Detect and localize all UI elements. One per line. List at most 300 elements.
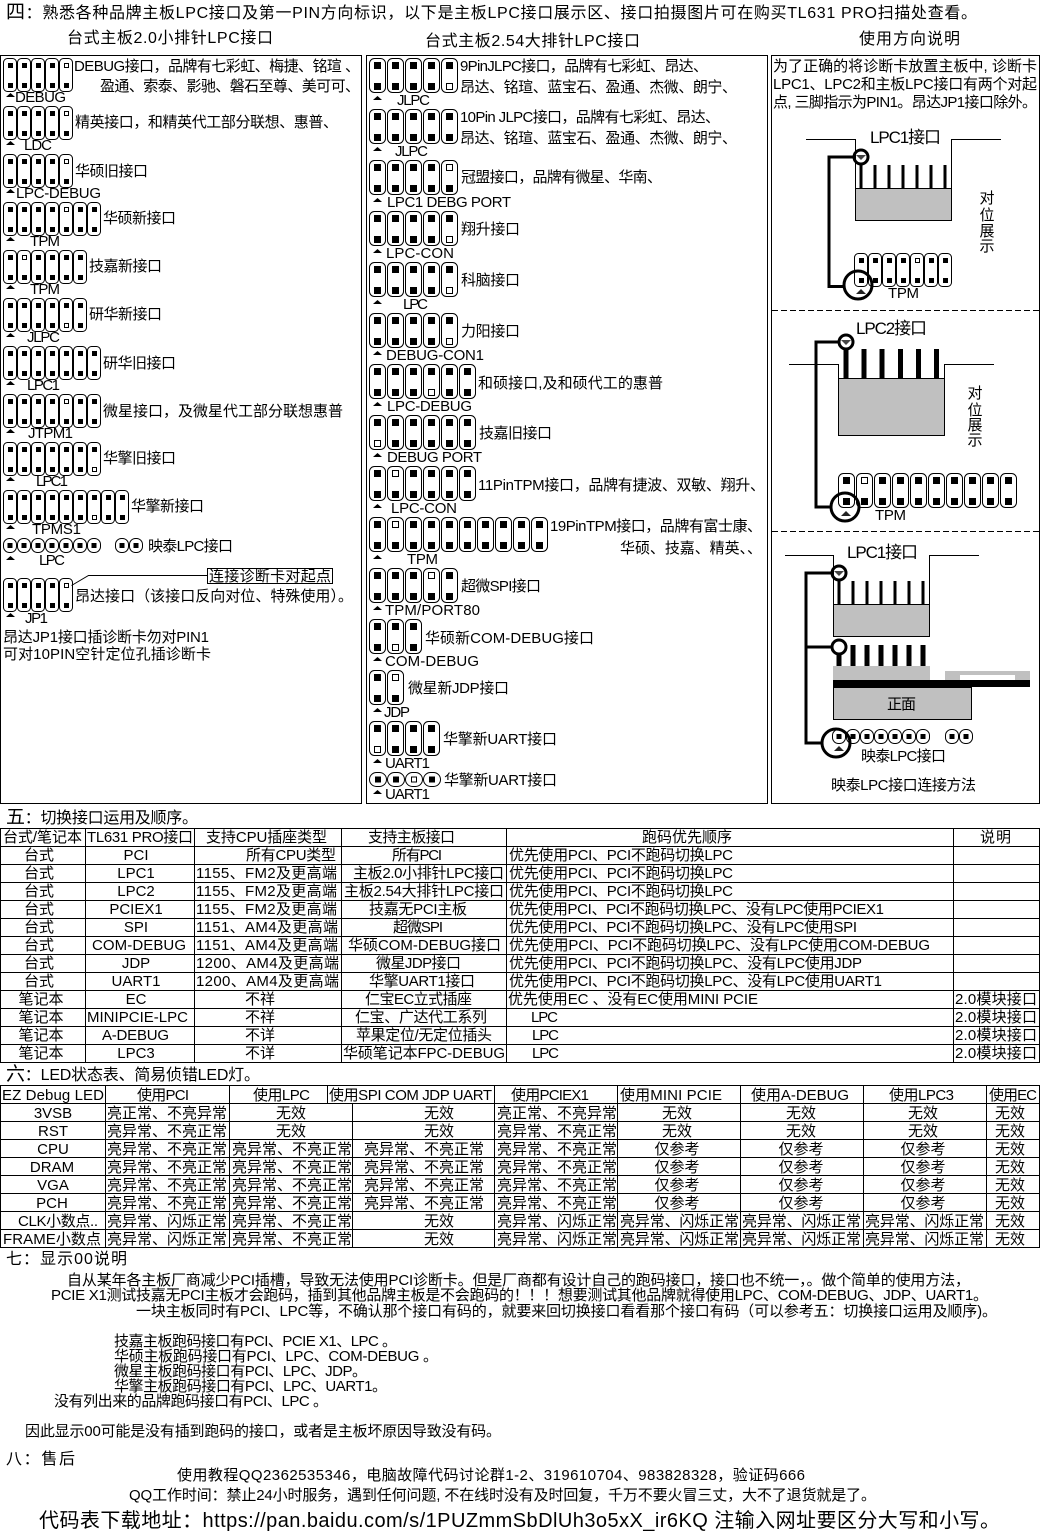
- diagram: LPC2 alignment: TPM: [875, 507, 906, 524]
- table header: 使用EC: [989, 1087, 1037, 1104]
- row: RST: 无效: [995, 1123, 1025, 1140]
- table header: 支持CPU插座类型: [206, 829, 327, 846]
- callout: connect start point: [72, 568, 332, 586]
- row: LPC3: LPC: [532, 1045, 559, 1062]
- row: DRAM: DRAM: [30, 1159, 74, 1176]
- diagram: LPC2 alignment: 对: [967, 385, 983, 402]
- row: LPC2: 台式: [24, 883, 54, 900]
- connector: JDP: JDP: [384, 704, 410, 721]
- connector: 11Pin TPM: 11PinTPM接口，品牌有捷波、双敏、翔升、: [478, 477, 765, 494]
- row: RST: 无效: [424, 1123, 454, 1140]
- row: CLK: 亮异常、闪烁正常: [865, 1213, 984, 1230]
- connector: JP1: JP1: [25, 610, 48, 627]
- row: PCI: 优先使用PCI、PCI不跑码切换LPC: [509, 847, 733, 864]
- row: JDP: 优先使用PCI、PCI不跑码切换LPC、没有LPC使用JDP: [509, 955, 862, 972]
- table header: EZ Debug LED: [2, 1087, 104, 1104]
- row: JDP: 1200、AM4及更高端: [196, 955, 339, 972]
- diagram: LPC1 alignment: 位: [979, 207, 995, 224]
- row: LPC1: 主板2.0小排针LPC接口: [353, 864, 504, 882]
- row: RST: 无效: [786, 1123, 816, 1140]
- connector: 19Pin TPM: TPM: [407, 551, 438, 568]
- connector: DEBUG: DEBUG: [15, 89, 66, 106]
- row: COM-DEBUG: 1151、AM4及更高端: [196, 937, 338, 954]
- connector: TPMS1: 华擎新接口: [131, 498, 204, 515]
- connector: 19Pin TPM: 华硕、技嘉、精英、、: [620, 539, 762, 557]
- row: PCI: 台式: [24, 847, 54, 864]
- connector: DEBUG-CON1: DEBUG-CON1: [386, 347, 484, 364]
- row: MINIPCIE-LPC: 不祥: [245, 1009, 275, 1026]
- row: CPU: 仅参考: [778, 1141, 824, 1158]
- connector: LPC-CON: LPC-CON: [386, 245, 454, 262]
- row: CPU: 亮异常、不亮正常: [364, 1141, 484, 1158]
- text: explanation paragraph: PCIE X1测试技嘉无PCI主板才会跑码，插到其他品牌主板是不会跑码的！！！想要测试其他品牌就得使用LPC、COM-DEBUG、JDP、UART1。: [51, 1286, 988, 1304]
- text: conclusion: 因此显示00可能是没有插到跑码的接口，或者是主板坏原因导致没有码。: [25, 1422, 501, 1440]
- row: RST: RST: [38, 1123, 68, 1140]
- row: DRAM: 仅参考: [654, 1159, 700, 1176]
- connector: 10Pin JLPC: JLPC: [395, 143, 428, 160]
- row: UART1: [24, 973, 882, 990]
- row: VGA: [37, 1177, 1025, 1194]
- row: UART1: UART1: [112, 973, 160, 990]
- table: LED status: [0, 1085, 1040, 1248]
- row: LPC1: 优先使用PCI、PCI不跑码切换LPC: [509, 865, 733, 882]
- row: SPI: 台式: [24, 919, 54, 936]
- connector: DEBUG: 盈通、索泰、影驰、磐石至尊、美可可、: [100, 78, 360, 95]
- row: LPC1: LPC1: [117, 865, 155, 882]
- row: COM-DEBUG: 华硕COM-DEBUG接口: [348, 937, 501, 954]
- connector: JLPC: JLPC: [27, 329, 60, 346]
- row: DRAM: 亮异常、不亮正常: [497, 1159, 617, 1176]
- row: FRAME: [3, 1231, 1025, 1248]
- row: RST: 亮异常、不亮正常: [107, 1123, 227, 1140]
- row: SPI: SPI: [124, 919, 148, 936]
- connector: LPC: LPC: [403, 296, 428, 313]
- row: PCI: PCI: [123, 847, 149, 864]
- row: LPC3: [18, 1045, 1037, 1062]
- diagram: LPC1 alignment: 对: [979, 190, 995, 207]
- table header: 跑码优先顺序: [642, 829, 732, 846]
- connector: TPMS1: TPMS1: [32, 521, 81, 538]
- text: brand interface list: [54, 1332, 438, 1410]
- table: switching interfaces: [0, 828, 1040, 1063]
- row: PCH: 仅参考: [900, 1195, 946, 1212]
- connector: 10Pin JLPC: 10Pin JLPC接口，品牌有七彩虹、昂达、: [460, 109, 720, 126]
- row: CLK: 亮异常、闪烁正常: [620, 1213, 739, 1230]
- connector: JTPM1: JTPM1: [28, 425, 73, 442]
- row: 3VSB: 无效: [908, 1105, 938, 1122]
- row: VGA: 亮异常、不亮正常: [107, 1177, 227, 1194]
- row: PCIEX1: 优先使用PCI、PCI不跑码切换LPC、没有LPC使用PCIEX1: [509, 901, 884, 918]
- row: A-DEBUG: 不详: [245, 1027, 275, 1044]
- row: 3VSB: [34, 1105, 1025, 1122]
- row: FRAME: 亮异常、闪烁正常: [107, 1231, 227, 1248]
- connector: LPC1 DEBG PORT: LPC1 DEBG PORT: [387, 194, 511, 211]
- table header: 说明: [980, 829, 1011, 846]
- connector: UART1 inline: UART1: [385, 786, 430, 803]
- row: LPC1: 1155、FM2及更高端: [196, 865, 337, 882]
- heading: section six: 六：LED状态表、简易侦错LED灯。: [6, 1063, 260, 1085]
- row: CLK: [18, 1213, 1025, 1230]
- diagram: biostar LPC alignment: [785, 543, 1030, 794]
- row: DRAM: 仅参考: [900, 1159, 946, 1176]
- connector: SPI: 超微SPI接口: [461, 578, 541, 595]
- text: explanation paragraph: 一块主板同时有PCI、LPC等，不确认那个接口有码的，就要来回切换接口看看那个接口有码（可以参考五：切换接口运用及顺序)。: [136, 1302, 997, 1320]
- row: MINIPCIE-LPC: 仁宝、广达代工系列: [355, 1009, 487, 1026]
- row: CLK: 亮异常、闪烁正常: [742, 1213, 861, 1230]
- diagram: LPC1 alignment: [806, 128, 1001, 302]
- heading: usage column: 使用方向说明: [859, 30, 960, 48]
- text: brand interface list: 技嘉主板跑码接口有PCI、PCIE X1、LPC 。: [114, 1332, 397, 1350]
- table header: 使用SPI COM JDP UART: [329, 1087, 492, 1104]
- connector: LPC-DEBUG: 华硕旧接口: [75, 163, 148, 180]
- diagram: LPC2 alignment: [789, 319, 1016, 524]
- connector: 9Pin JLPC: 9PinJLPC接口，品牌有七彩虹、昂达、: [460, 58, 708, 75]
- panel: small pin connectors: [0, 56, 362, 804]
- row: PCH: 仅参考: [778, 1195, 824, 1212]
- text: download address: 代码表下载地址：https://pan.baidu.com/s/1PUZmmSbDlUh3o5xX_ir6KQ 注输入网址要区分大写和小写。: [39, 1509, 1000, 1532]
- connector: UART1: UART1: [385, 755, 430, 772]
- row: PCH: [36, 1195, 1025, 1212]
- row: JDP: 台式: [24, 955, 54, 972]
- row: FRAME: 亮异常、不亮正常: [232, 1231, 352, 1248]
- connector: UART1 inline: 华擎新UART接口: [444, 772, 557, 789]
- connector: JTPM1: 微星接口，及微星代工部分联想惠普: [103, 403, 343, 420]
- diagram: LPC1 alignment: TPM: [888, 285, 919, 302]
- heading: large pin column: 台式主板2.54大排针LPC接口: [425, 32, 640, 50]
- row: FRAME: FRAME小数点: [3, 1231, 101, 1248]
- row: LPC2: 1155、FM2及更高端: [196, 883, 337, 900]
- connector: JP1: 昂达接口（该接口反向对位、特殊使用）。: [75, 588, 353, 605]
- row: SPI: 1151、AM4及更高端: [196, 919, 338, 936]
- text: brand interface list: 华硕主板跑码接口有PCI、LPC、COM-DEBUG 。: [114, 1347, 438, 1365]
- connector: LPC1 advantech: 研华旧接口: [103, 355, 176, 372]
- row: SPI: 超微SPI: [393, 919, 443, 936]
- note: JP1 usage: [3, 629, 211, 663]
- row: CPU: 仅参考: [654, 1141, 700, 1158]
- row: MINIPCIE-LPC: [18, 1009, 1037, 1026]
- connector: LPC: [370, 262, 520, 313]
- connector: 19Pin TPM: 19PinTPM接口，品牌有富士康、: [550, 517, 762, 535]
- connector: LPC-DEBUG: LPC-DEBUG: [16, 185, 101, 202]
- text: alignment intro: 点, 三脚指示为PIN1。昂达JP1接口除外。: [773, 94, 1037, 111]
- connector: LPC-DEBUG pegatron: 和硕接口,及和硕代工的惠普: [478, 375, 663, 392]
- row: PCH: PCH: [36, 1195, 68, 1212]
- row: RST: 亮异常、不亮正常: [497, 1123, 617, 1140]
- text: explanation paragraph: [51, 1271, 997, 1320]
- connector: TPM gigabyte new: 技嘉新接口: [89, 258, 162, 275]
- row: 3VSB: 无效: [995, 1105, 1025, 1122]
- row: CLK: 亮异常、闪烁正常: [497, 1213, 617, 1230]
- row: VGA: 亮异常、不亮正常: [497, 1177, 617, 1194]
- row: MINIPCIE-LPC: 2.0模块接口: [955, 1009, 1037, 1026]
- connector: LDC: 精英接口，和精英代工部分联想、惠普、: [75, 113, 338, 131]
- row: A-DEBUG: 2.0模块接口: [955, 1027, 1037, 1044]
- diagram: LPC1 alignment: LPC1接口: [870, 128, 941, 147]
- row: JDP: 微星JDP接口: [376, 955, 461, 972]
- text: alignment intro: 为了正确的将诊断卡放置主板中, 诊断卡: [773, 57, 1037, 75]
- row: PCH: 亮异常、不亮正常: [364, 1195, 484, 1212]
- row: VGA: VGA: [37, 1177, 69, 1194]
- row: FRAME: 无效: [424, 1231, 454, 1248]
- row: VGA: 无效: [995, 1177, 1025, 1194]
- row: 3VSB: 无效: [662, 1105, 692, 1122]
- connector: 9Pin JLPC: [370, 58, 737, 109]
- row: PCH: 无效: [995, 1195, 1025, 1212]
- connector: TPM asus new: 华硕新接口: [103, 210, 176, 227]
- table header: 使用PCIEX1: [511, 1087, 589, 1104]
- connector: LPC1 DEBG PORT: 冠盟接口，品牌有微星、华南、: [461, 169, 662, 186]
- text: alignment intro: [773, 57, 1037, 111]
- row: PCI: 所有CPU类型: [246, 847, 336, 864]
- row: DRAM: 亮异常、不亮正常: [364, 1159, 484, 1176]
- connector: LDC: LDC: [24, 137, 52, 154]
- row: 3VSB: 亮正常、不亮异常: [107, 1105, 227, 1122]
- row: SPI: [24, 919, 857, 936]
- row: DRAM: 亮异常、不亮正常: [232, 1159, 352, 1176]
- row: DRAM: 仅参考: [778, 1159, 824, 1176]
- connector: 9Pin JLPC: JLPC: [397, 92, 430, 109]
- row: LPC2: 主板2.54大排针LPC接口: [344, 882, 504, 900]
- row: UART1: 台式: [24, 973, 54, 990]
- connector: LPC1 DEBG PORT: [370, 160, 662, 211]
- row: LPC1: 台式: [24, 865, 54, 882]
- connector: TPMS1: [4, 490, 204, 538]
- connector: LPC-DEBUG: [4, 154, 148, 202]
- table header: [2, 1087, 1037, 1104]
- row: EC: 仁宝EC立式插座: [365, 991, 472, 1008]
- text: brand interface list: 华擎主板跑码接口有PCI、LPC、UART1。: [114, 1377, 387, 1395]
- heading: small pin column: 台式主板2.0小排针LPC接口: [67, 29, 273, 47]
- diagram: LPC2 alignment: 示: [967, 432, 983, 449]
- diagram: LPC1 alignment: 展: [979, 223, 995, 240]
- connector: JLPC: 研华新接口: [89, 306, 162, 323]
- row: EC: 笔记本: [18, 991, 64, 1008]
- text: brand interface list: 没有列出来的品牌跑码接口有PCI、LPC 。: [54, 1393, 328, 1410]
- connector: biostar LPC: [4, 538, 233, 569]
- row: RST: 无效: [276, 1123, 306, 1140]
- row: CPU: 亮异常、不亮正常: [232, 1141, 352, 1158]
- connector: LPC1 advantech: [4, 346, 176, 394]
- connector: JTPM1: [4, 394, 343, 442]
- connector: JLPC: [4, 298, 162, 346]
- row: PCH: 亮异常、不亮正常: [497, 1195, 617, 1212]
- connector: TPM gigabyte new: [4, 250, 162, 298]
- row: PCI: 所有PCI: [392, 847, 442, 864]
- connector: LPC1 advantech: LPC1: [27, 377, 60, 394]
- row: DRAM: [30, 1159, 1025, 1176]
- row: DRAM: 无效: [995, 1159, 1025, 1176]
- table header: [3, 828, 1011, 846]
- row: CPU: 亮异常、不亮正常: [497, 1141, 617, 1158]
- connector: DEBUG: [4, 58, 360, 106]
- connector: 11Pin TPM: [370, 466, 765, 517]
- connector: TPM gigabyte new: TPM: [30, 281, 60, 298]
- connector: UART1: 华擎新UART接口: [443, 731, 557, 748]
- row: COM-DEBUG: [24, 937, 930, 954]
- connector: JP1: [4, 578, 353, 627]
- row: LPC3: LPC3: [117, 1045, 155, 1062]
- row: CPU: 仅参考: [900, 1141, 946, 1158]
- row: EC: 优先使用EC 、没有EC使用MINI PCIE: [508, 991, 758, 1008]
- table header: 使用LPC: [253, 1087, 310, 1104]
- text: alignment intro: LPC1、LPC2和主板LPC接口有两个对起: [773, 75, 1037, 93]
- row: RST: 无效: [908, 1123, 938, 1140]
- text: support contacts: 使用教程QQ2362535346，电脑故障代码讨论群1-2、319610704、983828328，验证码666: [177, 1466, 805, 1484]
- row: PCH: 仅参考: [654, 1195, 700, 1212]
- row: FRAME: 亮异常、闪烁正常: [742, 1231, 861, 1248]
- row: LPC1: [24, 864, 733, 882]
- row: LPC3: 2.0模块接口: [955, 1045, 1037, 1062]
- row: EC: 不祥: [245, 991, 275, 1008]
- row: MINIPCIE-LPC: MINIPCIE-LPC: [87, 1009, 188, 1026]
- row: VGA: 亮异常、不亮正常: [232, 1177, 352, 1194]
- row: CLK: 亮异常、不亮正常: [232, 1213, 352, 1230]
- heading: section eight: 八：售后: [6, 1450, 75, 1468]
- text: explanation paragraph: 自从某年各主板厂商减少PCI插槽，导致无法使用PCI诊断卡。但是厂商都有设计自己的跑码接口，接口也不统一，。做个简单的使用方法，: [67, 1271, 970, 1289]
- connector: LPC: 科脑接口: [461, 272, 520, 289]
- connector: LPC-DEBUG pegatron: LPC-DEBUG: [387, 398, 472, 415]
- row: RST: [38, 1123, 1025, 1140]
- row: VGA: 仅参考: [778, 1177, 824, 1194]
- connector: DEBUG-CON1: [370, 314, 520, 364]
- row: PCI: [24, 847, 733, 864]
- connector: DEBUG PORT: [370, 416, 552, 466]
- row: CPU: 无效: [995, 1141, 1025, 1158]
- connector: LPC-CON: 翔升接口: [461, 221, 520, 238]
- row: DRAM: 亮异常、不亮正常: [107, 1159, 227, 1176]
- row: CLK: CLK小数点..: [18, 1213, 98, 1230]
- text: brand interface list: 微星主板跑码接口有PCI、LPC、JDP。: [114, 1362, 367, 1380]
- row: 3VSB: 无效: [276, 1105, 306, 1122]
- callout: connect start point: 连接诊断卡对起点: [209, 568, 331, 585]
- row: LPC3: 不详: [245, 1045, 275, 1062]
- row: FRAME: 无效: [995, 1231, 1025, 1248]
- row: PCH: 亮异常、不亮正常: [232, 1195, 352, 1212]
- row: COM-DEBUG: COM-DEBUG: [92, 937, 186, 954]
- row: PCIEX1: 1155、FM2及更高端: [196, 901, 337, 918]
- row: 3VSB: 亮正常、不亮异常: [497, 1105, 617, 1122]
- row: CLK: 亮异常、闪烁正常: [107, 1213, 227, 1230]
- diagram: biostar LPC alignment: 映泰LPC接口连接方法: [831, 777, 976, 794]
- table header: 台式/笔记本: [3, 829, 82, 846]
- connector: JDP: [370, 670, 509, 721]
- row: JDP: [24, 955, 862, 972]
- connector: TPM asus new: [4, 202, 176, 250]
- diagram: LPC2 alignment: 位: [967, 402, 983, 419]
- connector: 11Pin TPM: LPC-CON: [391, 500, 457, 517]
- row: CLK: 无效: [424, 1213, 454, 1230]
- row: 3VSB: 无效: [786, 1105, 816, 1122]
- panel: usage instructions: [772, 56, 1040, 804]
- connector: LPC-CON: [370, 212, 520, 262]
- row: FRAME: 亮异常、闪烁正常: [620, 1231, 739, 1248]
- row: PCIEX1: 台式: [24, 901, 54, 918]
- table header: 使用LPC3: [889, 1087, 954, 1104]
- connector: COM-DEBUG: COM-DEBUG: [385, 653, 479, 670]
- row: A-DEBUG: 笔记本: [18, 1027, 64, 1044]
- row: FRAME: 亮异常、闪烁正常: [865, 1231, 984, 1248]
- connector: SPI: [370, 568, 541, 619]
- row: MINIPCIE-LPC: LPC: [531, 1009, 558, 1026]
- row: EC: [18, 991, 1037, 1008]
- diagram: LPC2 alignment: 展: [967, 417, 983, 434]
- row: A-DEBUG: LPC: [532, 1027, 559, 1044]
- row: LPC3: 笔记本: [18, 1045, 64, 1062]
- table header: 使用MINI PCIE: [620, 1087, 722, 1104]
- table header: 使用A-DEBUG: [751, 1087, 849, 1104]
- row: COM-DEBUG: 优先使用PCI、PCI不跑码切换LPC、没有LPC使用COM-DEBUG: [509, 937, 930, 954]
- row: A-DEBUG: [18, 1027, 1037, 1044]
- row: CPU: [37, 1141, 1025, 1158]
- row: UART1: 华擎UART1接口: [369, 973, 475, 990]
- panel: large pin connectors: [366, 56, 768, 804]
- row: LPC2: 优先使用PCI、PCI不跑码切换LPC: [509, 883, 733, 900]
- connector: 10Pin JLPC: [370, 109, 737, 160]
- connector: UART1: [370, 722, 557, 772]
- connector: TPM asus new: TPM: [30, 233, 60, 250]
- connector: DEBUG PORT: DEBUG PORT: [387, 449, 482, 466]
- row: PCIEX1: 技嘉无PCI主板: [369, 900, 467, 918]
- row: PCIEX1: [24, 900, 884, 918]
- row: LPC2: LPC2: [117, 883, 155, 900]
- row: RST: 无效: [662, 1123, 692, 1140]
- row: CLK: 无效: [995, 1213, 1025, 1230]
- row: VGA: 亮异常、不亮正常: [364, 1177, 484, 1194]
- connector: 19Pin TPM: [370, 517, 762, 568]
- connector: biostar LPC: LPC: [39, 552, 65, 569]
- connector: LPC-DEBUG pegatron: [370, 364, 663, 415]
- heading: section four: 四：熟悉各种品牌主板LPC接口及第一PIN方向标识，以下是主板LPC接口展示区、接口拍摄图片可在购买TL631 PRO扫描处查看。: [6, 2, 977, 23]
- table header: 支持主板接口: [368, 828, 455, 846]
- diagram: biostar LPC alignment: LPC1接口: [847, 543, 918, 562]
- connector: UART1 inline: [370, 772, 557, 803]
- row: CPU: 亮异常、不亮正常: [107, 1141, 227, 1158]
- row: EC: 2.0模块接口: [955, 991, 1037, 1008]
- connector: 9Pin JLPC: 昂达、铭瑄、蓝宝石、盈通、杰微、朗宁、: [460, 79, 737, 96]
- row: PCIEX1: PCIEX1: [109, 901, 163, 918]
- row: A-DEBUG: 苹果定位/无定位插头: [356, 1027, 492, 1044]
- row: VGA: 仅参考: [654, 1177, 700, 1194]
- row: CPU: CPU: [37, 1141, 69, 1158]
- table header: 使用PCI: [137, 1087, 189, 1104]
- connector: DEBUG PORT: 技嘉旧接口: [479, 425, 552, 442]
- row: FRAME: 亮异常、闪烁正常: [497, 1231, 617, 1248]
- label: front side: 正面: [887, 696, 916, 713]
- row: UART1: 1200、AM4及更高端: [196, 973, 339, 990]
- row: COM-DEBUG: 台式: [24, 937, 54, 954]
- connector: SPI: TPM/PORT80: [385, 602, 480, 619]
- row: EC: EC: [126, 991, 147, 1008]
- row: A-DEBUG: A-DEBUG: [102, 1027, 169, 1044]
- connector: COM-DEBUG: 华硕新COM-DEBUG接口: [425, 630, 594, 647]
- diagram: LPC1 alignment: 示: [979, 238, 995, 255]
- heading: section five: 五：切换接口运用及顺序。: [6, 807, 198, 828]
- note: JP1 usage: 昂达JP1接口插诊断卡勿对PIN1: [3, 629, 209, 646]
- diagram: LPC2 alignment: LPC2接口: [856, 319, 927, 338]
- row: LPC3: 华硕笔记本FPC-DEBUG: [343, 1045, 505, 1062]
- connector: LDC: [4, 106, 338, 154]
- row: MINIPCIE-LPC: 笔记本: [18, 1009, 64, 1026]
- connector: DEBUG: DEBUG接口，品牌有七彩虹、梅捷、铭瑄 、: [74, 58, 360, 75]
- heading: section seven: 七：显示00说明: [6, 1250, 127, 1268]
- connector: LPC1 asrock: [4, 442, 176, 490]
- text: working hours: QQ工作时间：禁止24小时服务，遇到任何问题, 不在线时没有及时回复，千万不要火冒三丈，大不了退货就是了。: [129, 1486, 876, 1504]
- row: LPC2: [24, 882, 733, 900]
- row: 3VSB: 3VSB: [34, 1105, 72, 1122]
- row: VGA: 仅参考: [900, 1177, 946, 1194]
- diagram: biostar LPC alignment: 映泰LPC接口: [861, 748, 946, 765]
- row: SPI: 优先使用PCI、PCI不跑码切换LPC、没有LPC使用SPI: [509, 919, 857, 936]
